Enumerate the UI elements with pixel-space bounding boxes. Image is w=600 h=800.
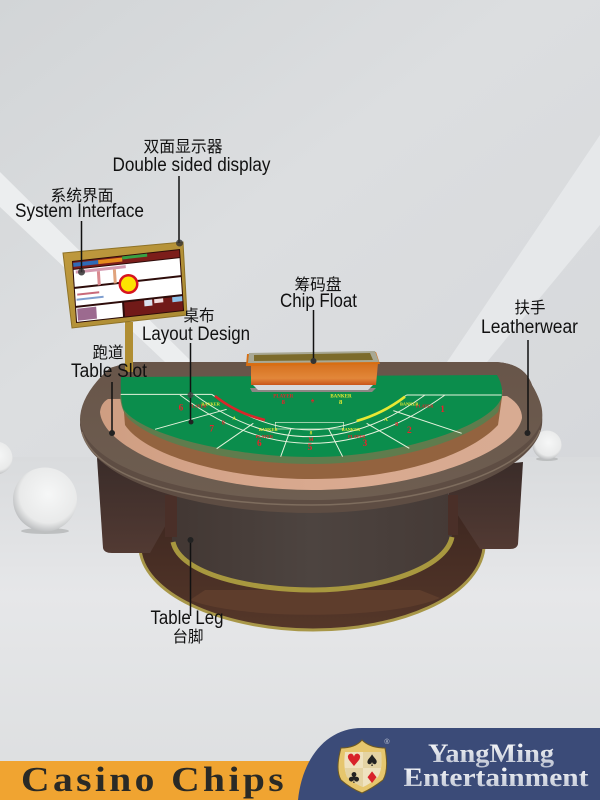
callout: layout design: 桌布 [184,302,214,326]
copper leather pad [100,396,522,490]
callout: table slot: 跑道 [92,339,124,363]
layout markings: 6 [257,439,262,449]
layout markings: BANKER [201,401,221,406]
layout markings: 8 [310,431,313,437]
layout markings [121,394,502,457]
layout markings: PLAYER [189,404,208,409]
callout: layout design: Layout Design [142,324,250,345]
layout markings: PLAYER [416,404,434,409]
layout markings: 1 [440,405,445,415]
layout markings: PLAYER [348,434,366,439]
footer banner: casino chips: Casino Chips [21,760,287,799]
callout: table slot [71,339,148,436]
layout markings: 6 [179,403,184,413]
system interface screen [72,249,184,323]
icon: card suit shield logo: ® [384,738,390,746]
double sided display monitor [63,242,187,328]
layout markings: A [384,417,388,423]
back legs [97,458,523,553]
layout markings: 8 [339,399,343,406]
callout: system interface: 系统界面 [50,182,114,206]
callout: double sided display: Double sided display [112,155,271,176]
icon: card suit shield logo: ♣ [347,769,361,787]
callout: double sided display: 双面显示器 [144,133,222,157]
brand name: Entertainment [404,763,589,792]
callout: system interface: System Interface [15,201,144,222]
callout: table leg [150,537,224,647]
layout markings: BANKER [259,427,278,432]
layout markings: ♠ [311,397,315,404]
green layout cloth [120,375,502,464]
icon: card suit shield logo: ♥ [346,751,362,771]
layout markings: PLAYER [273,394,294,399]
callout: table leg: 台脚 [172,623,204,647]
brand name [404,739,589,792]
callout: layout design [142,302,250,424]
layout markings: BANKER [400,401,419,406]
layout markings: BANKER [330,394,352,399]
layout markings: 3 [363,439,368,449]
callout: system interface [15,182,144,276]
icon: card suit shield logo [338,738,390,793]
callout: table leg: Table Leg [150,608,224,629]
table base with wood and gold ring [140,500,484,630]
icon: card suit shield logo: ♠ [365,751,379,770]
monitor stand [125,322,133,372]
icon: card suit shield logo: ♦ [365,768,379,787]
layout markings: 8 [222,421,225,427]
inner wood ledge below layout [123,390,503,479]
callout: leatherwear [481,294,579,436]
decorative white spheres [0,430,562,534]
layout markings: M [308,437,313,443]
callout: table slot: Table Slot [71,361,148,382]
layout markings: BANKER [342,427,361,432]
callout: leatherwear: 扶手 [514,294,546,318]
layout markings: 8 [395,422,398,428]
table rim and top [80,362,542,513]
footer brand panel [298,728,600,800]
layout markings: PLAYER [256,434,274,439]
callout: double sided display [112,133,271,246]
callout: chip float [280,271,358,364]
chip float tray [246,351,380,392]
layout markings: 7 [209,424,214,434]
layout markings: 2 [407,426,412,436]
table leg column with gold band [165,490,458,590]
layout markings: 5 [308,443,313,453]
brand name: YangMing [428,739,554,768]
callout: leatherwear: Leatherwear [481,317,579,338]
layout markings: 8 [282,399,286,406]
center logo [118,274,138,294]
callout: chip float: 筹码盘 [294,271,342,295]
layout markings: A [232,416,236,422]
callout: chip float: Chip Float [280,291,358,312]
